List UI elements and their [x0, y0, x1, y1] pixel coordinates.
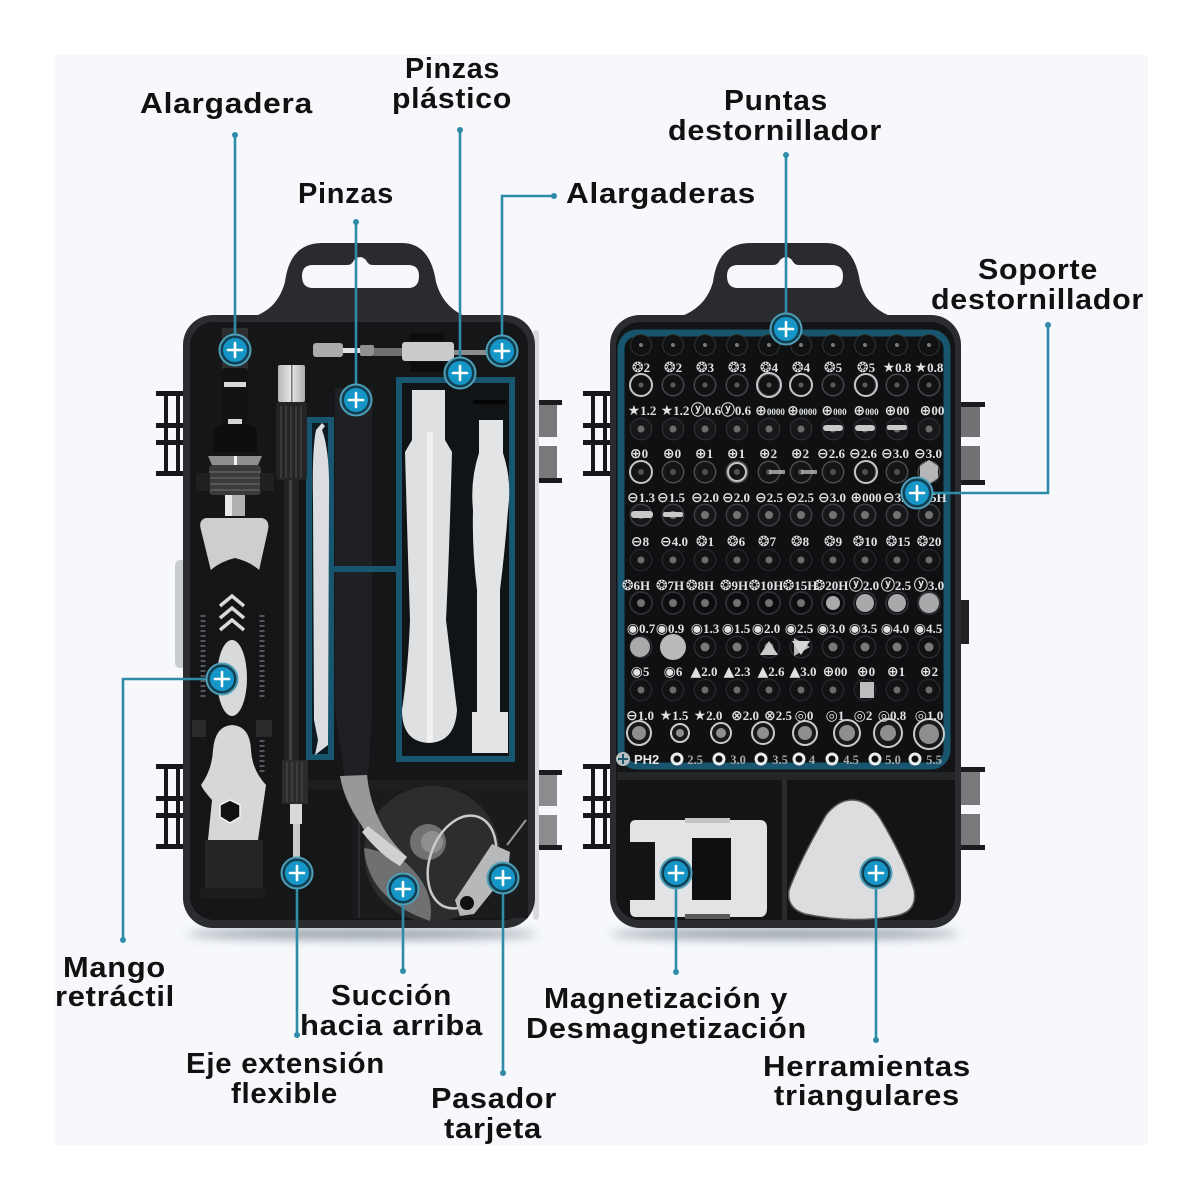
leader: Alargadera: [232, 132, 238, 335]
bit size labels: ⊕00: [823, 664, 847, 680]
bit size labels: ▲2.3: [723, 664, 751, 680]
leader: Herramientas triangulares: [873, 888, 879, 1043]
bit size labels: ⊕2: [759, 446, 777, 462]
bit size labels: ▲2.0: [690, 664, 718, 680]
label: Mango retráctil: retráctil: [55, 981, 175, 1013]
bit size labels: ⊕0: [630, 446, 648, 462]
bit size labels: ❂4: [760, 360, 778, 376]
label: Mango retráctil: Mango: [63, 952, 166, 984]
panel: right case: [583, 243, 985, 939]
bit size labels: ❂20: [917, 534, 941, 550]
bit size labels: 5.0: [885, 753, 901, 767]
label: Mango retráctil: [55, 952, 175, 1013]
bit size labels: ⊖3.0: [818, 490, 846, 506]
bit size labels: ◎2: [854, 708, 872, 724]
label: Succión hacia arriba: [300, 980, 483, 1042]
bit size labels: 3.0: [730, 753, 746, 767]
bit size labels: ⊕2: [791, 446, 809, 462]
leader: Succión hacia arriba: [400, 904, 406, 974]
bit size labels: ⊖2.0: [722, 490, 750, 506]
bit size labels: ⊖4.0: [660, 534, 688, 550]
bit size labels: ◎0: [795, 708, 813, 724]
large bits row: [627, 719, 944, 749]
bit size labels: ⊖2.5: [755, 490, 783, 506]
bit size labels: ◉1.5: [722, 621, 750, 637]
bit size labels: ❂3: [728, 360, 746, 376]
leader: Soporte destornillador: [930, 322, 1051, 493]
label: Eje extensión flexible: [186, 1048, 385, 1110]
label: Puntas destornillador: Puntas: [724, 85, 828, 117]
label: Succión hacia arriba: hacia arriba: [300, 1010, 483, 1042]
bit size labels: ◎0.8: [878, 708, 906, 724]
bit size labels: ★2.0: [694, 708, 722, 724]
bit size labels: ⊕1: [887, 664, 905, 680]
bit size labels: ⊕000: [850, 490, 882, 506]
bit size labels: ⊕000: [821, 403, 847, 419]
label: Magnetización y Desmagnetización: Desmagnetización: [526, 1013, 807, 1045]
bit size labels: ⊖1.5: [657, 490, 685, 506]
bit size labels: 5.5: [926, 753, 942, 767]
label: Alargadera: Alargadera: [140, 88, 313, 120]
bit size labels: ◉4.5: [914, 621, 942, 637]
label: Pasador tarjeta: tarjeta: [444, 1113, 542, 1145]
bit size labels: ◉3.0: [817, 621, 845, 637]
bit size labels: ❂9H: [720, 578, 748, 594]
leader: Mango retráctil: [120, 679, 208, 943]
bit size labels: ⊕0000: [755, 403, 785, 419]
bits grid: [641, 345, 930, 690]
label: Pinzas plástico: plástico: [392, 83, 512, 115]
leader: Eje extensión flexible: [294, 888, 300, 1038]
bit size labels: ❂8: [791, 534, 809, 550]
bit size labels: 4.5: [843, 753, 859, 767]
bit size labels: ⊕2: [920, 664, 938, 680]
bit size labels: ⊕00: [920, 403, 944, 419]
bit size labels: ★1.2: [661, 403, 689, 419]
bit size labels: ⊖3.0: [914, 446, 942, 462]
label: Pasador tarjeta: [431, 1083, 557, 1145]
bit size labels: ❂5: [857, 360, 875, 376]
tool: top extension bar: [313, 333, 506, 372]
bit size labels: ⊖2.6: [849, 446, 877, 462]
tool: plastic pry tool large: [402, 390, 457, 743]
bit size labels: ⊖1.3: [627, 490, 655, 506]
bit size labels: ❂15H: [783, 578, 817, 594]
bit size labels: ★0.8: [915, 360, 943, 376]
bit size labels: ❂4: [792, 360, 810, 376]
tool: suction cup and curved tube: [340, 775, 526, 922]
bit size labels: ★1.2: [628, 403, 656, 419]
leader: Alargaderas: [502, 193, 557, 336]
bit size labels: ❂15: [886, 534, 910, 550]
bit size labels: ◉2.5: [785, 621, 813, 637]
bit size labels: ⊗2.5: [764, 708, 792, 724]
bit size labels: ★1.5: [660, 708, 688, 724]
distinct bright bit details: [630, 373, 939, 698]
leader: Pasador tarjeta: [500, 893, 506, 1076]
tool: tweezers white: [313, 423, 329, 755]
bit size labels: ⊖3.5: [883, 490, 911, 506]
bit size labels: ❂10: [853, 534, 877, 550]
bit size labels: ❂7H: [656, 578, 684, 594]
bit size labels: ⓨ2.0: [849, 578, 879, 594]
bit size labels: ❂20H: [814, 578, 848, 594]
bit size labels: ⊕1: [695, 446, 713, 462]
bit size labels: 3.5: [772, 753, 788, 767]
tool: retractable screwdriver handle: [192, 328, 274, 898]
label: Pinzas plástico: [392, 53, 512, 115]
leader: Pinzas: [353, 219, 359, 385]
bit size labels: ◉2.0: [752, 621, 780, 637]
bit size labels: ⊕1: [727, 446, 745, 462]
bit size labels: ⓨ2.5: [881, 578, 911, 594]
label: Herramientas triangulares: triangulares: [774, 1080, 960, 1112]
bit size labels: ⊕0: [663, 446, 681, 462]
bit size labels: ⊖2.5: [786, 490, 814, 506]
bit size labels: ◉6: [664, 664, 682, 680]
panel: left case: [156, 243, 562, 939]
bit size labels: ❂9: [824, 534, 842, 550]
bit size labels: ◉1.3: [691, 621, 719, 637]
bit size labels: ⊕000: [853, 403, 879, 419]
label: Pinzas: Pinzas: [298, 178, 394, 210]
teal highlight frames in left case: [309, 380, 512, 759]
label: Eje extensión flexible: Eje extensión: [186, 1048, 385, 1080]
bit size labels: ❂1: [696, 534, 714, 550]
bit size labels: ◉5: [631, 664, 649, 680]
label: Soporte destornillador: Soporte: [978, 254, 1098, 286]
label: Magnetización y Desmagnetización: Magnetización y: [544, 983, 788, 1015]
bit size labels: ❂2: [632, 360, 650, 376]
bit size labels: [616, 360, 947, 767]
bit size labels: ⊕0000: [787, 403, 817, 419]
label: Herramientas triangulares: Herramientas: [763, 1051, 971, 1083]
bit size labels: ❂6H: [622, 578, 650, 594]
bit size labels: ⊕0: [857, 664, 875, 680]
bit size labels: ❂7: [758, 534, 776, 550]
label: Pasador tarjeta: Pasador: [431, 1083, 557, 1115]
bit size labels: ⓨ3.0: [914, 578, 944, 594]
label: Pinzas plástico: Pinzas: [405, 53, 500, 85]
bit size labels: ⓨ0.6: [691, 403, 721, 419]
bit size labels: 4: [809, 753, 816, 767]
label: Succión hacia arriba: Succión: [331, 980, 452, 1012]
bit size labels: ⊖8: [631, 534, 649, 550]
bit size labels: ★0.8: [883, 360, 911, 376]
bit size labels: ❂10H: [749, 578, 783, 594]
bit size labels: 25H: [923, 490, 947, 505]
bit size labels: ◉0.9: [656, 621, 684, 637]
bit size labels: ❂3: [696, 360, 714, 376]
bit size labels: ❂8H: [686, 578, 714, 594]
label: Eje extensión flexible: flexible: [231, 1078, 338, 1110]
bit size labels: ❂5: [824, 360, 842, 376]
label: Herramientas triangulares: [763, 1051, 971, 1112]
bit size labels: 2.5: [687, 753, 703, 767]
bit size labels: ⊖2.6: [817, 446, 845, 462]
tool: plastic pry tool small: [472, 420, 509, 753]
bit size labels: ◎1.0: [915, 708, 943, 724]
hotspot markers: [206, 314, 932, 904]
bit size labels: ⊖2.0: [691, 490, 719, 506]
bit size labels: ◉3.5: [849, 621, 877, 637]
leader: Pinzas plástico: [457, 127, 463, 360]
bit size labels: ❂6: [727, 534, 745, 550]
bit size labels: ▲2.6: [757, 664, 785, 680]
label: Alargaderas: Alargaderas: [566, 178, 756, 210]
leader: Magnetización: [673, 888, 679, 975]
label: Soporte destornillador: [931, 254, 1144, 316]
bit size labels: ⊕00: [885, 403, 909, 419]
bit size labels: ⊖3.0: [881, 446, 909, 462]
bit size labels: ❂2: [664, 360, 682, 376]
tool: triangular opener: [789, 800, 915, 920]
bit size labels: ⓨ0.6: [721, 403, 751, 419]
leader: Puntas destornillador: [783, 152, 789, 315]
bit size labels: ◎1: [826, 708, 844, 724]
tool: flexible extension shaft: [276, 365, 308, 860]
tool: magnetizer: [630, 818, 767, 919]
bit size labels: PH2: [634, 752, 659, 767]
bit size labels: ▲3.0: [789, 664, 817, 680]
label: Puntas destornillador: destornillador: [668, 115, 882, 147]
bit size labels: ◉0.7: [627, 621, 655, 637]
bit size labels: ⊗2.0: [731, 708, 759, 724]
bit size labels: ◉4.0: [881, 621, 909, 637]
label: Soporte destornillador: destornillador: [931, 284, 1144, 316]
label: Magnetización y Desmagnetización: [526, 983, 807, 1045]
label: Puntas destornillador: [668, 85, 882, 147]
bit size labels: ⊖1.0: [626, 708, 654, 724]
